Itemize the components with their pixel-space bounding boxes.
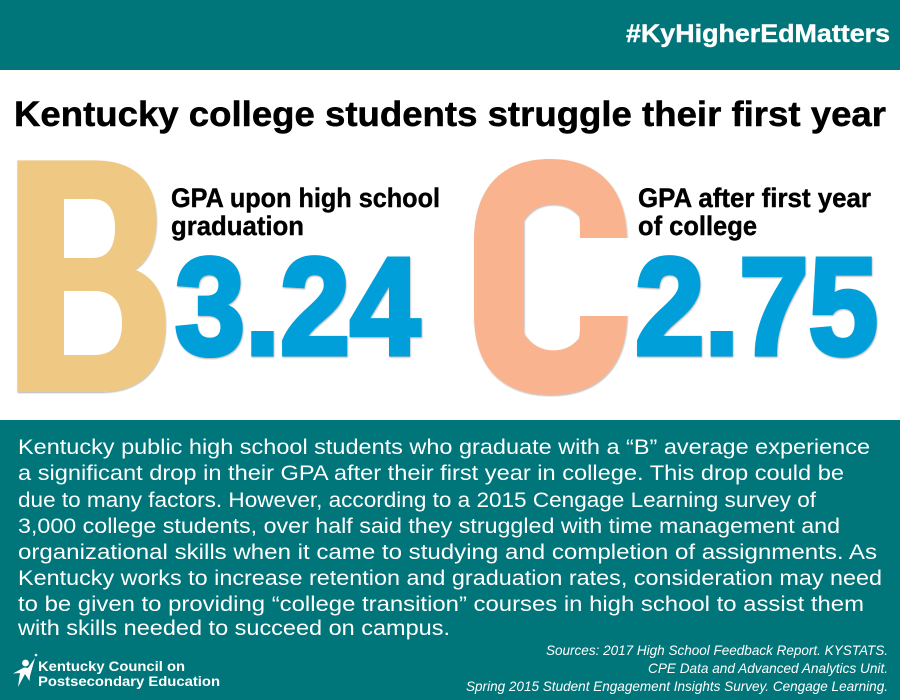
letter grade B: B [4,95,173,458]
body paragraph: 3,000 college students, over half said they struggled with time management and [18,514,840,538]
body paragraph: due to many factors. However, according to a 2015 Cengage Learning survey of [18,488,816,512]
label: GPA after first year of college: GPA after first year [638,183,871,213]
panel: high school GPA [4,95,440,458]
title: Kentucky college students struggle their first year [14,95,886,134]
body paragraph [17,435,882,640]
logo text [38,658,220,689]
sources: Sources: 2017 High School Feedback Report. KYSTATS. [546,642,888,658]
value 3.24: 3.24 [175,230,420,384]
logo text: Postsecondary Education [38,673,220,689]
footer panel [0,420,900,700]
letter grade C: C [468,99,628,456]
logo: Kentucky Council on Postsecondary Education [13,654,220,689]
header band [0,0,900,70]
label: GPA upon high school graduation: GPA upon high school [171,183,440,213]
logo text: Kentucky Council on [38,658,185,674]
hashtag: #KyHigherEdMatters [626,20,890,48]
body paragraph: to be given to providing “college transition” courses in high school to assist them [18,592,864,616]
sources: Spring 2015 Student Engagement Insights Survey. Cengage Learning. [466,678,888,694]
body paragraph: Kentucky public high school students who graduate with a “B” average experience [18,435,870,459]
body paragraph: a significant drop in their GPA after their first year in college. This drop could be [18,461,844,485]
label: GPA after first year of college [638,183,871,241]
icon: leaping figure [13,654,37,687]
label: GPA upon high school graduation [171,183,440,241]
label: GPA after first year of college: of college [638,211,757,241]
body paragraph: Kentucky works to increase retention and graduation rates, consideration may need [18,566,882,590]
body paragraph: organizational skills when it came to studying and completion of assignments. As [18,540,877,564]
value 2.75: 2.75 [635,230,878,384]
sources: CPE Data and Advanced Analytics Unit. [648,660,888,676]
label: GPA upon high school graduation: graduation [171,211,304,241]
sources [466,642,888,694]
body paragraph: with skills needed to succeed on campus. [17,616,450,640]
panel: college GPA [468,99,878,456]
